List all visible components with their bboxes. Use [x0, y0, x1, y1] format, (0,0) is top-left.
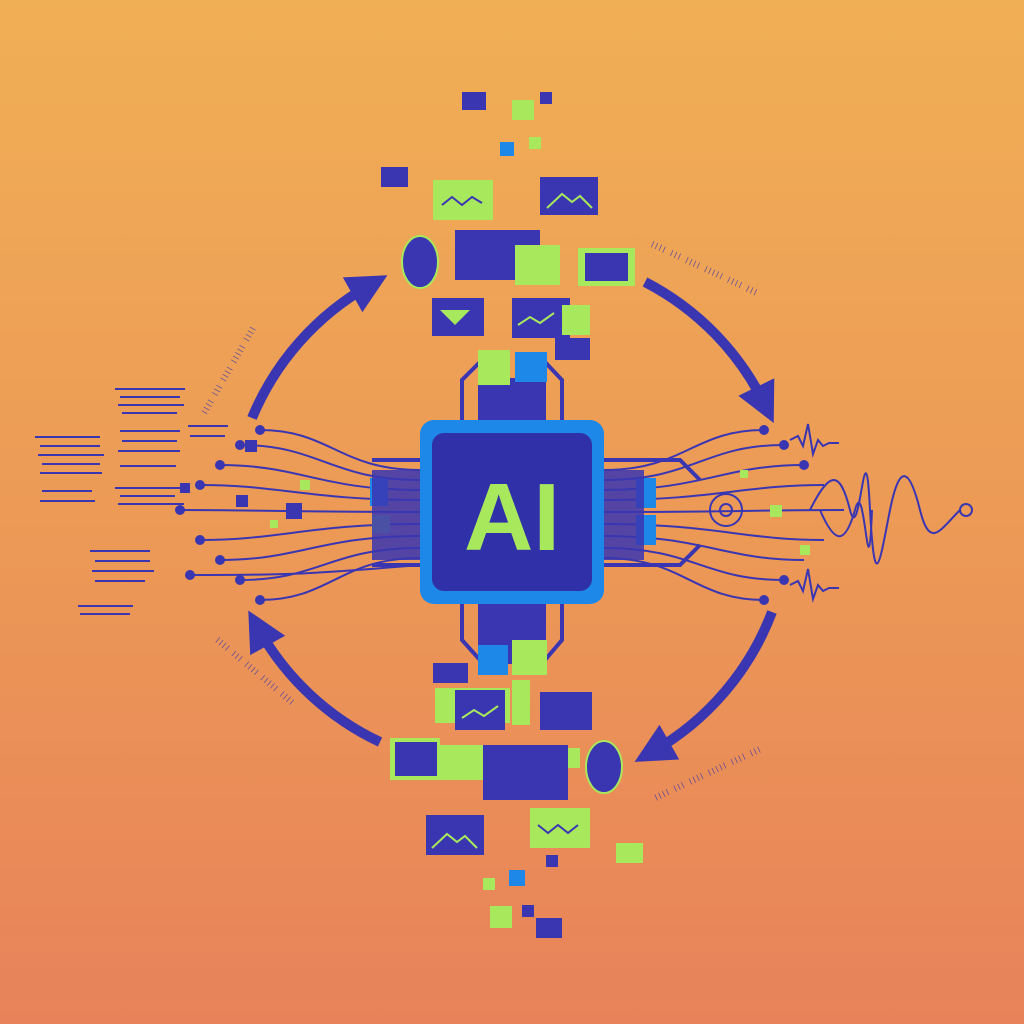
circuit bus: left/right/top/bottom — [372, 362, 700, 660]
chip label: AI — [464, 464, 560, 571]
circuit lines: left — [176, 426, 420, 604]
column tiles: top — [381, 92, 635, 385]
text ticks along arcs: |||| ||| |||| ||||| |||| — [201, 325, 258, 416]
arrow: bottom-right arc — [652, 612, 772, 752]
arrow: top-left arc — [252, 285, 370, 418]
text ticks along arcs: |||| ||| |||| ||||| |||| ||| — [649, 240, 759, 297]
arrow: bottom-left arc — [258, 628, 380, 742]
text ticks along arcs: |||| ||| |||| ||||| |||| ||| — [653, 746, 763, 803]
text ticks along arcs: |||| ||| |||| ||||| |||| — [213, 636, 295, 707]
text lines: left — [35, 388, 228, 615]
AI chip — [420, 420, 604, 604]
waveform — [790, 424, 972, 599]
squares: left scattered — [180, 440, 390, 533]
arrow: top-right arc — [645, 282, 765, 405]
column tiles: bottom — [390, 640, 643, 938]
squares: right scattered — [636, 470, 810, 555]
text ticks along arcs — [201, 240, 763, 803]
circuit lines: right — [604, 426, 844, 604]
